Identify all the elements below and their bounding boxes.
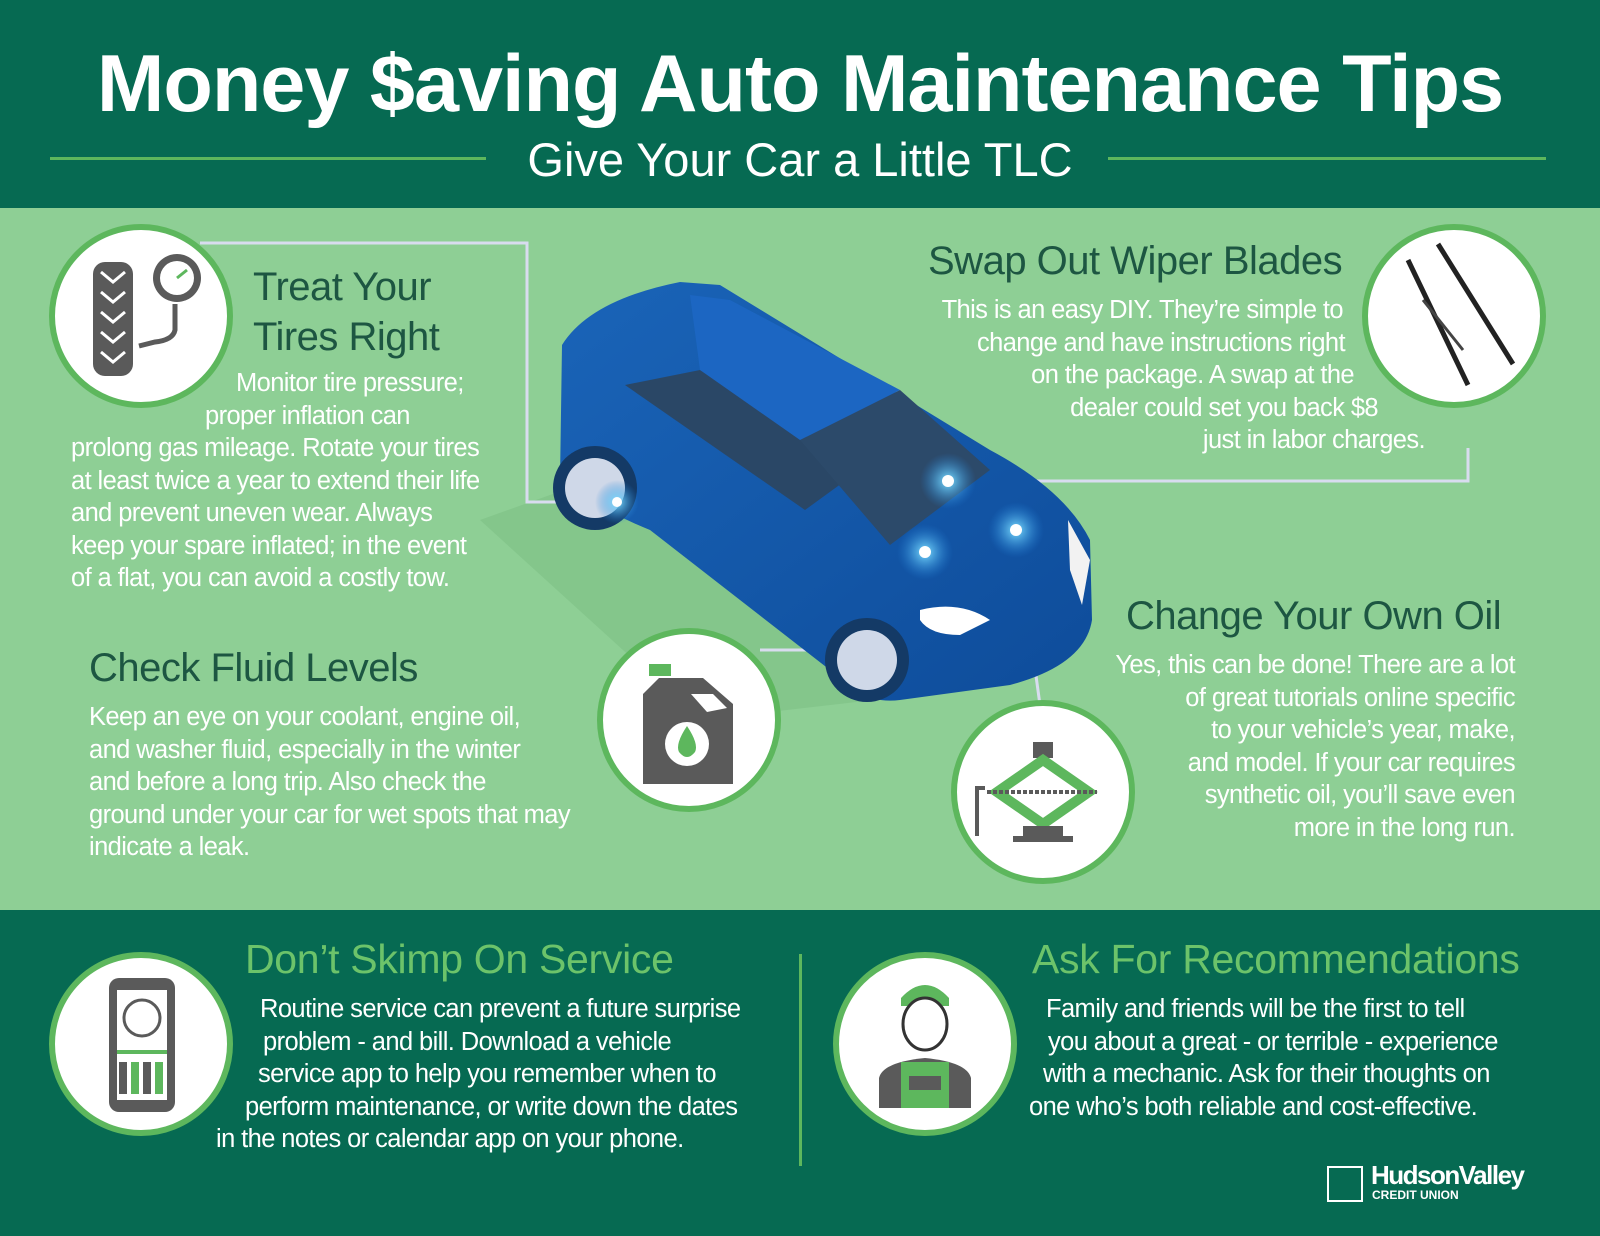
text: wipers: change and have instructions right [977,328,1345,356]
text: fluids [89,703,570,861]
text: oil: of great tutorials online specific [1185,684,1515,712]
text: service: in the notes or calendar app on your phone. [216,1125,684,1153]
bottom band [0,910,1600,1236]
text: oil [1115,651,1516,842]
logo: CREDIT UNION [1372,1188,1459,1202]
text: wipers [942,296,1425,454]
heading: tires [253,265,440,359]
text: service [216,995,740,1153]
subtitle: Give Your Car a Little TLC [527,133,1073,186]
text: wipers: dealer could set you back $8 [1070,394,1378,422]
heading: recommendations: Ask For Recommendations [1032,936,1520,982]
text: service: perform maintenance, or write down the dates [245,1092,737,1120]
text: tires: and prevent uneven wear. Always [71,499,432,527]
icon: wiper blades [1362,224,1546,408]
text: fluids: and before a long trip. Also check the [89,768,486,796]
text: service: Routine service can prevent a future surprise [260,995,740,1023]
heading: tires: Tires Right [253,315,439,359]
text: tires: of a flat, you can avoid a costly tow. [71,564,449,592]
text: tires: at least twice a year to extend their life [71,466,480,494]
icon: tire and gauge [49,224,233,408]
text: tires: keep your spare inflated; in the event [71,532,466,560]
text: oil: synthetic oil, you’ll save even [1205,781,1515,809]
text: oil: to your vehicle’s year, make, [1211,716,1515,744]
icon: mechanic [833,952,1017,1136]
text: wipers: just in labor charges. [1203,426,1425,454]
text: fluids: ground under your car for wet spots that may [89,800,570,828]
icon: oil jug [597,628,781,812]
text: recommendations: you about a great - or terrible - experience [1048,1028,1498,1056]
text: oil: more in the long run. [1294,814,1515,842]
header band [0,0,1600,208]
text: oil: and model. If your car requires [1188,748,1515,776]
heading: oil: Change Your Own Oil [1126,594,1501,638]
text: recommendations: one who’s both reliable and cost-effective. [1029,1092,1477,1120]
text: recommendations: with a mechanic. Ask for their thoughts on [1043,1060,1490,1088]
title: Money $aving Auto Maintenance Tips [97,39,1503,129]
text: oil: Yes, this can be done! There are a lot [1115,651,1515,679]
text: service: problem - and bill. Download a vehicle [263,1028,671,1056]
text: wipers: This is an easy DIY. They’re simple to [942,296,1343,324]
text: recommendations: Family and friends will be the first to tell [1046,995,1465,1023]
icon: phone app [49,952,233,1136]
text: tires: proper inflation can [205,402,410,430]
heading: wipers: Swap Out Wiper Blades [928,239,1342,283]
text: fluids: Keep an eye on your coolant, engine oil, [89,703,520,731]
icon: car jack [951,700,1135,884]
text: tires: Monitor tire pressure; [236,369,464,397]
car illustration [553,282,1092,702]
logo: HudsonValley [1371,1160,1524,1190]
heading: fluids: Check Fluid Levels [89,646,418,690]
heading: service: Don’t Skimp On Service [245,936,674,982]
heading: tires: Treat Your [253,265,431,309]
text: tires: prolong gas mileage. Rotate your tires [71,434,479,462]
divider [799,954,802,1166]
text: wipers: on the package. A swap at the [1031,361,1354,389]
text: fluids: indicate a leak. [89,833,250,861]
logo [1327,1160,1525,1202]
text: tires [71,369,480,592]
text: service: service app to help you remember when to [258,1060,716,1088]
text: recommendations [1029,995,1498,1120]
text: fluids: and washer fluid, especially in the winter [89,736,520,764]
